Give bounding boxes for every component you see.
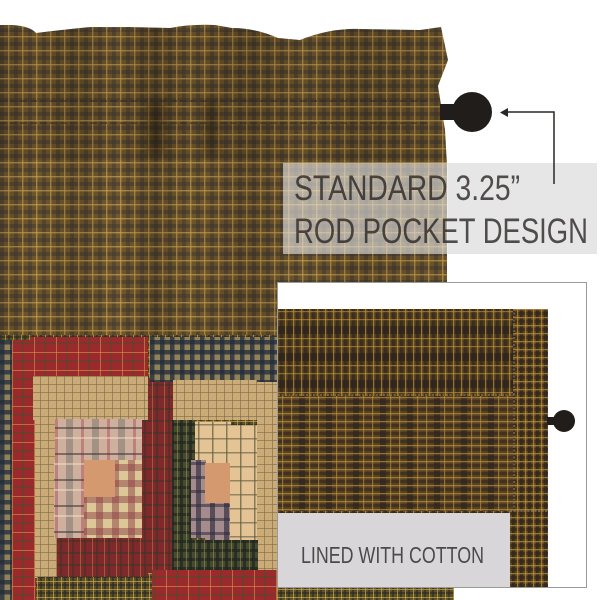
patch: cream check right — [230, 425, 257, 540]
patch: tan vertical — [35, 420, 57, 578]
patch: peach square left — [84, 460, 115, 497]
callout label: rod pocket: STANDARD 3.25” — [294, 169, 520, 208]
patch: navy left strip — [0, 340, 12, 600]
patch: red check right — [115, 460, 142, 497]
patch: peach square right — [205, 463, 230, 503]
inset fabric swatch — [278, 309, 548, 587]
quilted log cabin patchwork — [0, 335, 454, 600]
patch: red center vertical — [148, 378, 173, 573]
cotton lining with label — [278, 513, 510, 587]
patch: pink plaid left — [54, 460, 84, 538]
arrow: points from label to rod — [500, 108, 554, 184]
fabric strip under inset — [277, 587, 454, 600]
patch: tan horizontal — [33, 376, 148, 420]
cotton lining with label: LINED WITH COTTON — [301, 542, 484, 568]
patch: dark green vertical — [172, 420, 195, 575]
patch: navy top right — [150, 337, 280, 382]
inset panel: fabric detail — [278, 282, 586, 588]
patch: pink plaid top — [55, 419, 145, 460]
curtain panel: plaid valance with rod pocket — [0, 20, 450, 350]
patch: red top block — [30, 337, 148, 381]
patch: grey plaid lower — [206, 503, 230, 540]
patch: dark red right of center — [142, 420, 148, 580]
icon: small curtain rod end — [547, 410, 575, 432]
patch: dark red plaid lower — [57, 538, 145, 580]
patch: tan vertical right — [257, 382, 278, 575]
patch: red check lower — [84, 497, 144, 538]
patch: tan horizontal right — [173, 380, 257, 420]
patch: navy pink left — [191, 460, 206, 538]
icon: curtain rod end — [440, 92, 492, 132]
patch: olive bottom — [37, 577, 150, 600]
patch: cream check top — [195, 422, 231, 464]
patch: red left strip — [12, 340, 36, 600]
patch: green plaid lower — [172, 540, 258, 575]
patch: red bottom right — [152, 570, 280, 600]
callout label: rod pocket — [283, 163, 597, 254]
